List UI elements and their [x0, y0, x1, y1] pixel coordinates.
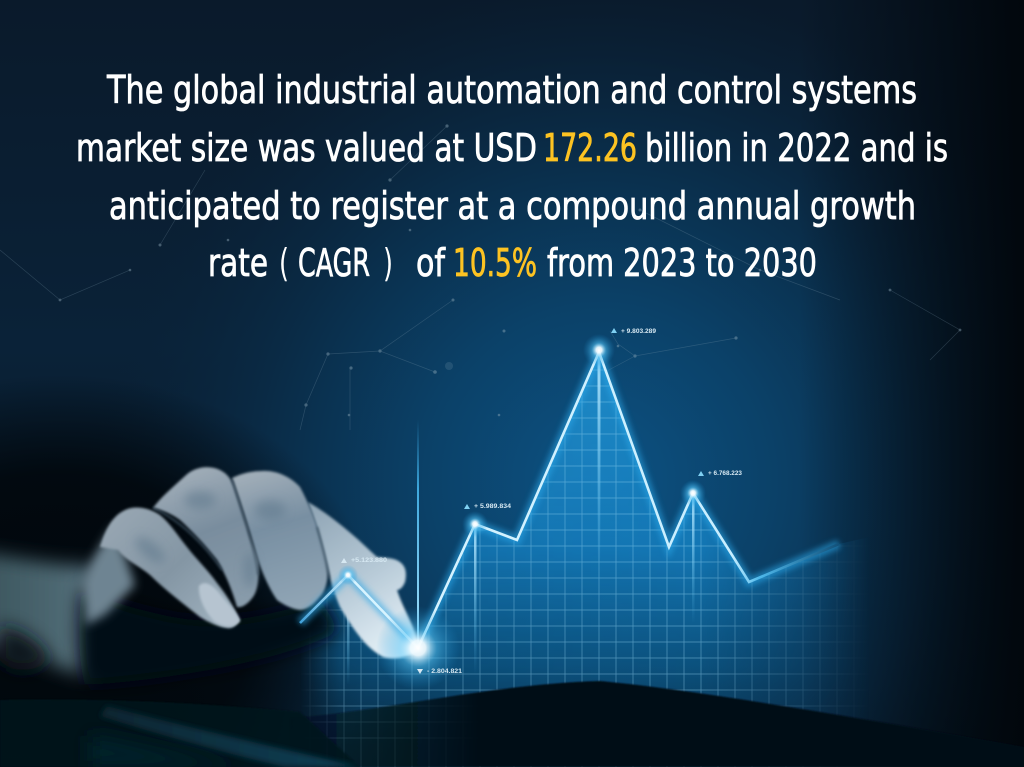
- label: value middle: + 5.989.834: [474, 504, 512, 510]
- label: peak value: + 9.803.289: [621, 329, 657, 335]
- vertical light beams: [347, 352, 694, 685]
- finger creases: [153, 480, 329, 578]
- label: value on finger: +5.123.880: [351, 558, 388, 564]
- tablet surface: [0, 681, 1024, 767]
- headline line 4: from 2023 to 2030: [547, 241, 817, 285]
- index finger: [308, 502, 417, 658]
- label: low value: [417, 669, 463, 675]
- label: value middle: [464, 504, 512, 510]
- label: peak value: [611, 328, 657, 335]
- label: low value: - 2.804.821: [427, 669, 463, 675]
- label: value right: + 6.768.223: [708, 471, 743, 477]
- headline line 4: CAGR: [298, 241, 370, 285]
- finger shading: [131, 491, 286, 588]
- headline line 4: (: [279, 241, 289, 285]
- wrist and back of hand: [0, 552, 95, 675]
- headline text: [76, 68, 948, 285]
- headline line 4: [208, 241, 817, 285]
- data labels: [341, 328, 743, 675]
- headline line 2: market size was valued at USD: [76, 126, 537, 170]
- headline line 4: ): [383, 241, 393, 285]
- headline line 2: [76, 126, 948, 170]
- back of hand under knuckle: [83, 525, 135, 625]
- headline line 4: 10.5%: [453, 241, 537, 285]
- headline line 4: rate: [208, 241, 268, 285]
- middle finger: [153, 467, 258, 607]
- chart line with glow: [300, 352, 839, 648]
- ring-side finger with knuckle: [232, 471, 328, 610]
- label: value on finger: [341, 558, 388, 564]
- headline line 2: 172.26: [543, 126, 637, 170]
- curled finger with nail: [100, 508, 240, 628]
- chart grid: [306, 370, 848, 767]
- headline line 4: of: [416, 241, 446, 285]
- line chart: filled area and grid: [304, 356, 859, 767]
- fingernail: [199, 583, 240, 626]
- dark palm: [79, 590, 340, 685]
- network of connected dots: [0, 124, 961, 430]
- glowing data points: [338, 334, 706, 690]
- hand pressing the chart: [0, 467, 417, 685]
